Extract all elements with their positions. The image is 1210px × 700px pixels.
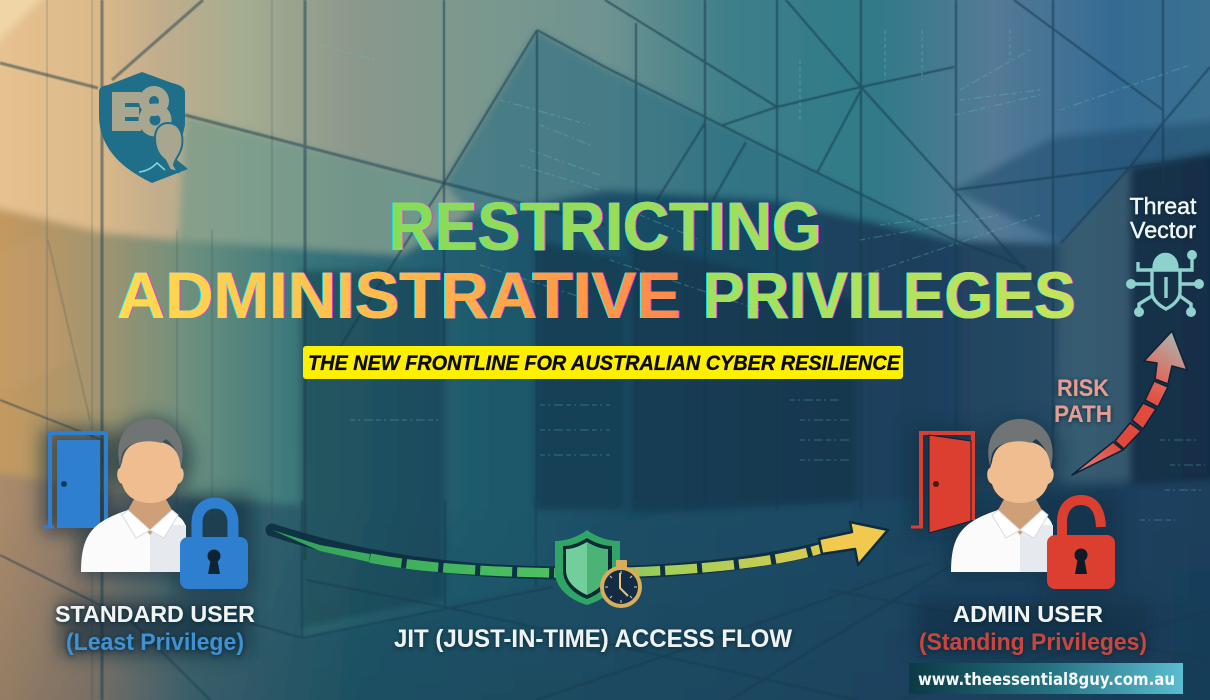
- label: least privilege: (Least Privilege): [66, 629, 244, 656]
- label: standing privileges: (Standing Privileges): [919, 629, 1147, 656]
- arrow: risk path: [1072, 331, 1187, 475]
- label: threat vector: Vector: [1130, 217, 1196, 243]
- title: [117, 188, 1076, 332]
- label: standard user: STANDARD USER: [55, 601, 255, 627]
- icon: person: [81, 419, 186, 572]
- icon: threat bug: [1126, 250, 1204, 317]
- label: threat vector: [1130, 193, 1197, 243]
- subtitle banner: THE NEW FRONTLINE FOR AUSTRALIAN CYBER RESILIENCE: [308, 352, 901, 375]
- label: admin user: ADMIN USER: [953, 601, 1103, 627]
- label: risk path: [1054, 375, 1112, 428]
- website banner: www.theessential8guy.com.au: [918, 670, 1175, 690]
- icon: closed padlock: [180, 503, 248, 589]
- icon: blue door: [43, 433, 106, 528]
- label: risk path: RISK: [1057, 375, 1110, 402]
- label: JIT access flow: JIT (JUST-IN-TIME) ACCESS FLOW: [394, 625, 792, 653]
- arrow: JIT access flow: [272, 522, 888, 573]
- label: risk path: PATH: [1054, 401, 1112, 428]
- title: PRIVILEGES: [703, 258, 1076, 332]
- panel: standard user: [42, 418, 255, 656]
- subtitle banner: [303, 346, 903, 379]
- panel: admin user: [908, 418, 1150, 656]
- logo: E8 shield: [99, 72, 188, 183]
- icon: shield with stopwatch: [555, 530, 640, 606]
- label: threat vector: Threat: [1130, 193, 1197, 219]
- icon: person: [951, 419, 1054, 572]
- title: ADMINISTRATIVE: [117, 258, 681, 332]
- title: RESTRICTING: [389, 188, 822, 265]
- icon: open red door: [911, 433, 973, 533]
- icon: open padlock: [1047, 500, 1115, 589]
- website banner: [909, 663, 1183, 694]
